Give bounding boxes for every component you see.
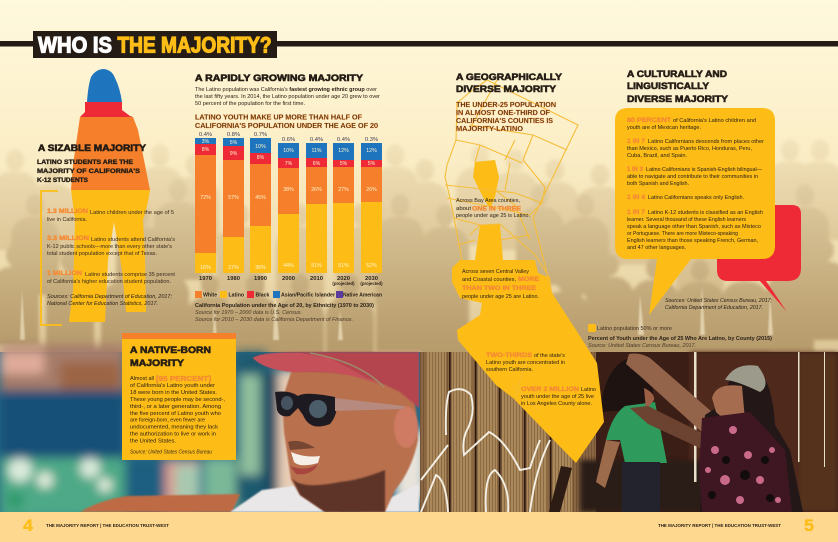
section: a geographically diverse majority: [445, 72, 772, 463]
stat: 3.3 million: [47, 235, 175, 257]
stat and body: the United States.: [130, 438, 176, 444]
callout: central valley: THAN TWO IN THREE: [462, 285, 536, 292]
subheading: latino students: K-12 STUDENTS: [37, 177, 89, 184]
stat and body: undocumented, meaning they lack: [130, 424, 218, 430]
stat and body: the five percent of Latino youth who: [130, 411, 221, 417]
bar 1990: 8%: [257, 155, 265, 161]
heading: [130, 345, 211, 369]
stat: 1.3 million: [47, 208, 174, 223]
bar 2020: [332, 137, 355, 286]
bar 1990: 10%: [255, 144, 266, 150]
stat and body: are foreign-born, even fewer are: [130, 418, 205, 424]
culture stats: 1 IN 7: [627, 209, 645, 216]
callout: bay area: people under age 25 is Latino.: [456, 213, 530, 219]
heading: A NATIVE-BORN: [130, 345, 211, 356]
callout: central valley: MORE: [518, 276, 539, 283]
bar 2020: (projected): [332, 281, 355, 286]
intro text: The Latino population was California's fastest growing ethnic group over: [195, 87, 377, 93]
culture stats: and 47 other languages.: [627, 245, 686, 251]
sources: [47, 294, 173, 307]
chart heading: CALIFORNIA'S POPULATION UNDER THE AGE OF 20: [195, 121, 378, 130]
map subheading: [456, 100, 556, 133]
cap: [253, 352, 419, 408]
heading: DIVERSE MAJORITY: [456, 84, 557, 95]
culture stats: Latino Californians speaks only English.: [648, 195, 744, 201]
heading: [627, 69, 729, 105]
callout: bay area: about: [456, 206, 472, 212]
culture stats: Cuba, Brazil, and Spain.: [627, 153, 687, 159]
chart caption: California Population under the Age of 20, by Ethnicity (1970 to 2030): [195, 303, 374, 309]
child: [596, 358, 667, 512]
chart legend: Native American: [343, 292, 382, 298]
bar 2030: 2030: [365, 276, 378, 282]
bar 1980: 9%: [230, 151, 238, 157]
title banner: WHO IS: [38, 32, 112, 58]
stat: 1.3 million: live in California.: [47, 217, 87, 223]
section: a culturally and linguistically diverse majority: [615, 69, 801, 315]
wall light streaks: [694, 352, 825, 482]
stat and body: third-, or a later generation. Among: [130, 404, 221, 410]
heading: A GEOGRAPHICALLY: [456, 72, 563, 83]
bar 2000: 10%: [283, 148, 294, 154]
stat: 1 million: Latino students comprise 35 percent: [85, 272, 176, 278]
silhouette figure: [69, 69, 150, 322]
culture stats: 1 IN 4: [627, 194, 645, 201]
callout: central valley: Across seven Central Valley: [462, 269, 529, 275]
ear: [394, 406, 418, 448]
chart caption: Source for 2010 – 2030 data is California Department of Finance.: [195, 317, 353, 323]
bar 1990: [250, 132, 271, 282]
bar 2030: [360, 137, 383, 286]
stat and body: [95 PERCENT]: [156, 374, 212, 383]
orange band: [122, 333, 236, 339]
stat: 3.3 million: Latino students attend California's: [91, 237, 175, 243]
sources: California Department of Education, 2017.: [665, 305, 763, 311]
map legend: [588, 324, 772, 349]
arm: [80, 494, 240, 512]
chart caption: Source for 1970 – 2000 data is U.S. Census.: [195, 310, 302, 316]
bar 2030: 52%: [366, 263, 377, 269]
bar 2000: 44%: [283, 263, 294, 269]
footer text left: THE MAJORITY REPORT | THE EDUCATION TRUST-WEST: [46, 523, 169, 528]
grandmother: [626, 354, 803, 512]
bar 2010: 11%: [312, 148, 322, 154]
bar 1970: 72%: [200, 195, 211, 201]
chart heading: [195, 112, 378, 130]
map legend: Percent of Youth under the Age of 25 Who Are Latino, by County (2015): [588, 336, 772, 342]
callout: central valley: people under age 25 are Latino.: [462, 294, 539, 300]
heading: [456, 72, 563, 95]
chart legend: [195, 291, 382, 298]
bar 2010: 51%: [311, 263, 322, 269]
bar 2020: 5%: [340, 161, 348, 167]
chalk figure: [421, 389, 550, 512]
subheading: latino students: LATINO STUDENTS ARE THE: [37, 159, 134, 166]
page background: [0, 0, 838, 352]
callout: two-thirds: TWO-THIRDS: [486, 352, 532, 359]
culture stats: 80 PERCENT: [627, 117, 672, 124]
chart legend: Latino: [228, 292, 244, 298]
sources: National Center for Education Statistics, 2017.: [47, 301, 158, 307]
culture stats: both Spanish and English.: [627, 181, 689, 187]
red speech bubble: [717, 205, 801, 312]
heading: DIVERSE MAJORITY: [627, 94, 729, 105]
bar 2020: 0.4%: [337, 137, 350, 143]
bar 1990: 45%: [255, 195, 266, 201]
culture stats: Latino Californians is Spanish-English bilingual—: [646, 167, 763, 173]
sources: [665, 298, 773, 311]
bar 1970: [195, 132, 216, 282]
section: a sizable majority: [37, 143, 176, 325]
culture stats: English learners than those speaking French, German,: [627, 238, 758, 244]
chart heading: LATINO YOUTH MAKE UP MORE THAN HALF OF: [195, 112, 362, 122]
callout: two-thirds: [486, 352, 565, 373]
yellow panel: [122, 339, 236, 460]
map subheading: MAJORITY-LATINO: [456, 124, 523, 133]
stat: 1 million: of California's higher education student population.: [47, 279, 171, 285]
culture stats: 1 IN 3: [627, 166, 643, 173]
sunglasses: [275, 392, 404, 427]
footer strip: [0, 512, 838, 542]
bar 2030: 12%: [366, 148, 377, 154]
stat: 3.3 million: 3.3 MILLION: [47, 235, 89, 242]
culture stats: youth are of Mexican heritage.: [627, 125, 701, 131]
bar 1980: 0.8%: [227, 132, 240, 138]
stat and body: 18 were born in the United States.: [130, 390, 217, 396]
culture stats: than Mexico, such as Puerto Rico, Honduras, Peru,: [627, 146, 752, 152]
callout: two-thirds: of the state's: [534, 353, 565, 359]
bar 2000: 2000: [282, 276, 295, 282]
title banner: THE MAJORITY?: [118, 32, 272, 58]
photo: wood wall, child and grandmother: [420, 352, 838, 512]
photo: man in red cap: [0, 345, 425, 518]
map legend: Latino population 50% or more: [597, 326, 672, 332]
source: Source: United States Census Bureau: [130, 450, 212, 456]
stat and body: the authorization to live or work in: [130, 432, 216, 438]
callout: two-thirds: southern California.: [486, 367, 533, 373]
section: a native-born majority: [122, 333, 236, 460]
subheading: latino students: MAJORITY OF CALIFORNIA'S: [37, 168, 141, 175]
bar 1970: 1970: [199, 276, 212, 282]
stacked bar chart: [195, 132, 383, 286]
bar 2000: 7%: [285, 161, 293, 167]
intro text: the last fifty years. In 2014, the Latino population under age 20 grew to over: [195, 94, 380, 100]
bar 1970: 3%: [202, 139, 210, 145]
bar 2010: 6%: [313, 161, 321, 167]
stat: 1.3 million: 1.3 MILLION: [47, 208, 88, 215]
callout: over 2 million: youth under the age of 25 live: [521, 394, 594, 400]
callout: over 2 million: in Los Angeles County alone.: [521, 401, 592, 407]
bar 2010: 26%: [311, 187, 322, 193]
bar 1980: 1980: [227, 276, 240, 282]
stat and body: [130, 374, 225, 444]
california map: [445, 80, 604, 463]
heading: LINGUISTICALLY: [627, 81, 710, 92]
bar 2000: 0.6%: [282, 137, 295, 143]
intro text: [195, 87, 380, 107]
page number 5: 5: [804, 516, 814, 535]
bar 1980: 57%: [228, 195, 239, 201]
sources: Sources: California Department of Education, 2017;: [47, 294, 173, 300]
map subheading: CALIFORNIA'S COUNTIES IS: [456, 116, 553, 125]
bar 1990: 0.7%: [254, 132, 267, 138]
bar 2000: [278, 137, 299, 282]
bar 2010: 2010: [310, 276, 323, 282]
callout: bay area: Across Bay Area counties,: [456, 198, 520, 204]
heading: a sizable majority: A SIZABLE MAJORITY: [38, 143, 147, 154]
stat: 3.3 million: total student population except that of Texas.: [47, 251, 157, 257]
stat: 1 million: [47, 270, 176, 285]
page number 4: 4: [23, 516, 34, 535]
chart legend: Asian/Pacific Islander: [281, 292, 335, 298]
culture stats: 1 IN 7: [627, 138, 645, 145]
bar 2020: 2020: [337, 276, 350, 282]
sources: Sources: United States Census Bureau, 2017;: [665, 298, 773, 304]
callout: central valley: and Coastal counties,: [462, 277, 516, 283]
bracket: [41, 191, 62, 325]
heading: MAJORITY: [130, 358, 185, 369]
culture stats: learner. Several thousand of these English learners: [627, 217, 746, 223]
heading: A CULTURALLY AND: [627, 69, 727, 80]
post: [549, 466, 572, 512]
stat: 1.3 million: Latino children under the age of 5: [90, 210, 174, 216]
crowd silhouette background: [0, 140, 838, 352]
chart legend: White: [203, 292, 217, 298]
callout: over 2 million: Latino: [581, 387, 596, 393]
subheading: latino students: [37, 159, 141, 184]
stat: 1 million: 1 MILLION: [47, 270, 82, 277]
callout: bay area: ONE IN THREE: [472, 206, 521, 212]
stat: 3.3 million: K-12 public schools—more than every other state's: [47, 244, 172, 250]
section: a rapidly growing majority: [195, 73, 383, 323]
bar 2030: 0.3%: [365, 137, 378, 143]
stat and body: Almost all: [130, 376, 154, 382]
map subheading: IN ALMOST ONE-THIRD OF: [456, 108, 551, 117]
map subheading: THE UNDER-25 POPULATION: [456, 100, 556, 109]
bar 2030: (projected): [360, 281, 383, 286]
bar 2020: 27%: [338, 187, 349, 193]
yellow speech bubble: [615, 108, 775, 315]
bar 1980: 27%: [228, 265, 239, 271]
footer text right: THE MAJORITY REPORT | THE EDUCATION TRUST-WEST: [658, 523, 781, 528]
shirt: [230, 484, 419, 512]
bar 2020: 12%: [338, 148, 349, 154]
culture stats: speak a language other than Spanish, such as Mixteco: [627, 224, 761, 230]
bar 2010: [306, 137, 327, 282]
smile: [291, 452, 320, 465]
bar 1980: 5%: [230, 140, 238, 146]
bar 1990: 1990: [254, 276, 267, 282]
chart legend: Black: [256, 292, 269, 298]
bar 1980: [223, 132, 244, 282]
callout: bay area: [456, 198, 530, 219]
culture stats: Latino K-12 students is classified as an English: [648, 210, 763, 216]
title banner: [0, 31, 838, 58]
bar 2020: 51%: [338, 263, 349, 269]
intro text: 50 percent of the population for the first time.: [195, 101, 305, 107]
culture stats: [627, 117, 764, 251]
culture stats: or Portuguese. There are more Mixteco-speaking: [627, 231, 738, 237]
stat and body: of California's Latino youth under: [130, 383, 215, 389]
heading: A RAPIDLY GROWING MAJORITY: [195, 73, 364, 84]
culture stats: of California's Latino children and: [673, 118, 756, 124]
bar 2030: 5%: [368, 161, 376, 167]
culture stats: able to navigate and contribute to their communities in: [627, 174, 758, 180]
callout: central valley: [462, 269, 539, 300]
bar 1970: 0.4%: [199, 132, 212, 138]
bar 1970: 16%: [200, 265, 211, 271]
callout: over 2 million: OVER 2 MILLION: [521, 386, 579, 393]
map legend: Source: United States Census Bureau, 2017.: [588, 343, 696, 349]
bar 2030: 26%: [366, 187, 377, 193]
chart caption: [195, 303, 374, 323]
stat and body: These young people may be second-,: [130, 397, 225, 403]
bar 1990: 36%: [255, 265, 266, 271]
bar 2000: 38%: [283, 187, 294, 193]
callout: over 2 million: [521, 386, 596, 407]
culture stats: Latino Californians descends from places other: [648, 139, 764, 145]
bar 1970: 8%: [202, 147, 210, 153]
bar 2010: 0.4%: [310, 137, 323, 143]
callout: two-thirds: Latino youth are concentrated in: [486, 360, 565, 366]
neck and face: [282, 366, 418, 512]
